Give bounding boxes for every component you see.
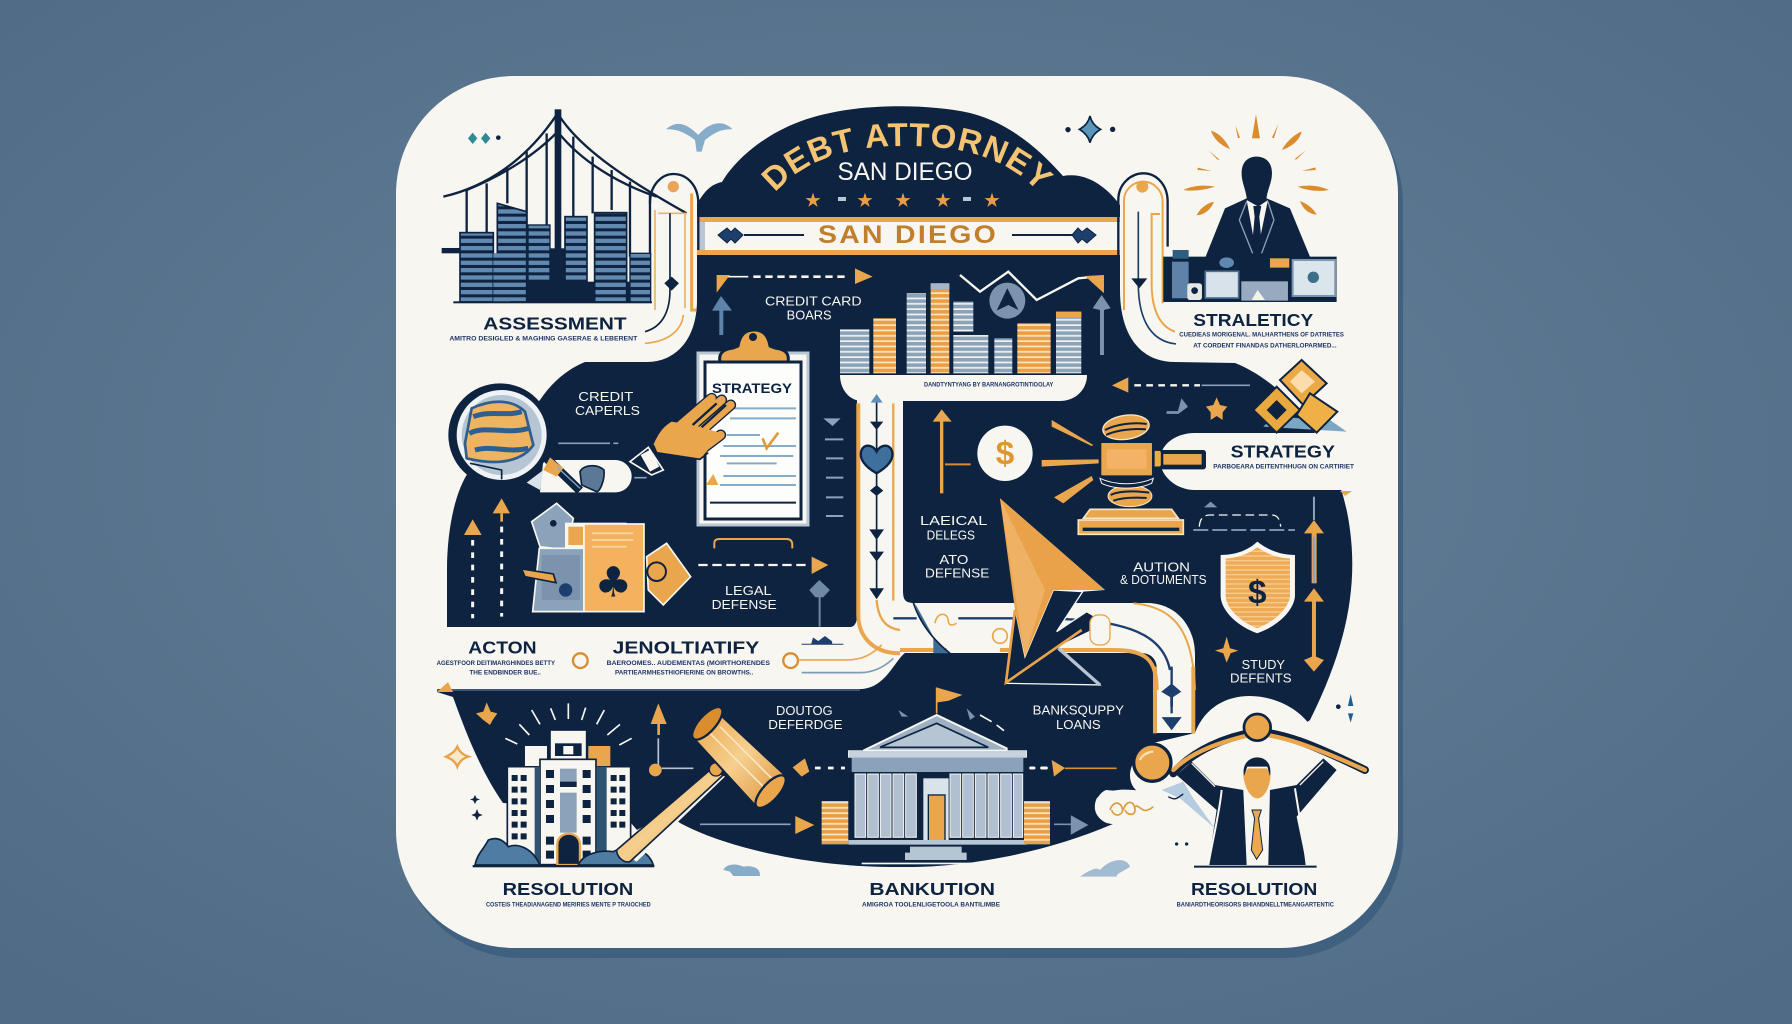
heading: resolution left: RESOLUTION: [503, 879, 633, 899]
right side arrows and labels: DEFENTS: [1230, 671, 1292, 686]
icon: courthouse: BANKSQUPPY: [1033, 702, 1124, 717]
heading: action and jenoltiatify band: BAEROOMES.. AUDEMENTAS (MOIRTHORENDES: [607, 660, 771, 667]
white strategy pill: [1160, 433, 1392, 490]
white dome behind figure: [1096, 696, 1330, 824]
icon: shield: $: [1248, 574, 1267, 611]
icon: dollar coin and arrow: [933, 409, 1033, 493]
heading: bankution: [862, 860, 1130, 909]
heading: action and jenoltiatify band: ACTON: [468, 637, 537, 657]
icon: clipboard: [698, 330, 808, 525]
labels: lateral designs: LAEICAL: [920, 513, 987, 528]
small tick marks: [823, 418, 843, 516]
resolution right caption: BANIARDTHEORISORS BHIANDNELLTMEANGARTENTIC: [1177, 902, 1334, 909]
bankution caption: AMIGROA TOOLENLIGETOOLA BANTILIMBE: [862, 902, 1001, 909]
icon: shield: [1221, 542, 1295, 633]
label: credit capabilities: CAPERLS: [575, 403, 640, 418]
title stars: ★: [805, 191, 821, 210]
right side arrows and labels: STUDY: [1242, 657, 1285, 672]
icon: big star arrow: [1000, 498, 1110, 685]
left dashed arrows: [464, 498, 510, 618]
strategy caption: CUEDIEAS MORIGENAL. MALHARTHENS OF DATRIETES: [1179, 332, 1344, 339]
up arrow near building: DOUTOG: [776, 703, 833, 718]
heading: action and jenoltiatify band: THE ENDBINDER BUE..: [469, 669, 541, 676]
heading: strategy top right: [1179, 310, 1344, 349]
bar chart: [840, 272, 1111, 389]
banner: [697, 217, 1120, 255]
icon: attorney with scale beam: [1134, 694, 1365, 868]
resolution left caption: COSTEIS THEADIANAGEND MERIRIES MENTE P TRAIOCHED: [486, 902, 651, 909]
heading: action and jenoltiatify band: [437, 637, 893, 676]
legal defense arrow and label: LEGAL: [725, 583, 772, 598]
icon: magnifier: [448, 383, 604, 492]
icon: dollar coin and arrow: $: [996, 435, 1015, 472]
subtitle: SAN DIEGO: [838, 158, 972, 186]
labels: lateral designs: DEFENSE: [925, 565, 989, 580]
title stars: [805, 191, 1000, 210]
labels: lateral designs: DELEGS: [927, 527, 975, 542]
heading: strategy middle right: STRATEGY: [1231, 441, 1335, 461]
up arrow near building: DEFERDGE: [768, 717, 843, 732]
heading: strategy top right: STRALETICY: [1193, 310, 1313, 330]
icon: attorney at desk: [1163, 114, 1337, 302]
left path loop: [645, 174, 698, 343]
top dashed arrow and label: BOARS: [787, 307, 832, 322]
labels: lateral designs: ATO: [939, 552, 968, 567]
heading: strategy top right: AT CORDENT FINANDAS DATHERLOPARMED...: [1193, 342, 1337, 349]
clipboard heading: STRATEGY: [712, 380, 793, 396]
icon: gold banknotes: [1253, 360, 1347, 433]
gold tip right: [1340, 491, 1352, 496]
chart caption: DANDTYNTYANG BY BARNANGROTINTIOOLAY: [924, 382, 1054, 389]
icon: gavel: [1042, 412, 1206, 534]
right side arrows and labels: & DOTUMENTS: [1120, 572, 1207, 587]
label: credit capabilities: [558, 389, 647, 478]
icon: hand: [630, 398, 731, 475]
label: credit card: CREDIT CARD: [765, 294, 862, 309]
card panel: [396, 76, 1398, 948]
icon: small diamonds: [468, 133, 501, 144]
title stars: ★: [935, 191, 951, 210]
top right dashed arrow: [1112, 377, 1250, 420]
icon: bridge and skyline: [442, 109, 687, 303]
icon: bird: [666, 123, 733, 152]
small cloud: [1080, 860, 1130, 877]
right side arrows and labels: [1120, 497, 1324, 686]
icon: courthouse: LOANS: [1056, 717, 1101, 732]
legal defense arrow and label: [698, 539, 830, 627]
strategy middle caption: PARBOEARA DEITENTHHUGN ON CARTIRIET: [1213, 463, 1354, 470]
title stars: ★: [857, 191, 873, 210]
heading: action and jenoltiatify band: PARTIEARMHESTHIOFIERINE ON BROWTHS..: [615, 669, 753, 676]
gold tip: [437, 682, 453, 692]
white winding path band: [396, 400, 1195, 733]
icon: left small sparkles: [446, 747, 760, 876]
labels: lateral designs: [920, 513, 989, 580]
heading: resolution left: [486, 879, 651, 909]
heading: assessment: [449, 313, 637, 343]
white pill under bar chart: [840, 375, 1087, 401]
icon: large gavel: [617, 702, 791, 862]
heading: resolution right: RESOLUTION: [1191, 879, 1317, 899]
icon: courthouse: [848, 688, 1124, 864]
heading: action and jenoltiatify band: JENOLTIATIFY: [613, 637, 759, 657]
heading: resolution right: [1177, 879, 1334, 909]
right column with hearts: [858, 394, 900, 653]
icon: money documents: [522, 503, 691, 612]
title stars: ★: [895, 191, 911, 210]
banner arrows: [718, 228, 1096, 243]
white credit pill: [540, 460, 632, 492]
icon: office building: [473, 702, 654, 867]
heading: bankution: BANKUTION: [869, 879, 995, 899]
right side arrows and labels: AUTION: [1133, 560, 1190, 575]
lower column stripes: [1155, 667, 1193, 733]
heading: assessment: ASSESSMENT: [483, 313, 627, 333]
icon: money documents: ♣: [595, 558, 632, 607]
heading: strategy middle right: [1213, 441, 1354, 470]
icon: sparkle: [1065, 116, 1115, 143]
right path loop: [1118, 173, 1176, 344]
top dashed arrow and label: [712, 268, 873, 335]
label: credit capabilities: CREDIT: [578, 389, 633, 404]
banner text: SAN DIEGO: [818, 221, 998, 249]
icon: cloud with squiggle: [1095, 790, 1180, 824]
title stars: ★: [984, 191, 1000, 210]
heading: action and jenoltiatify band: AGESTFOOR DEITIMARGHINDES BETTY: [437, 660, 555, 667]
assessment caption: AMITRO DESIGLED & MAGHING GASERAE & LEBERENT: [449, 336, 637, 343]
card shadow: [401, 84, 1403, 958]
bottom band edge shadow: [438, 689, 860, 691]
title: DEBT ATTORNEY: [760, 123, 1054, 191]
dark central map shape: [437, 106, 1352, 867]
path stripes: [893, 603, 1195, 707]
up arrow near building: [649, 703, 848, 844]
legal defense arrow and label: DEFENSE: [712, 597, 777, 612]
